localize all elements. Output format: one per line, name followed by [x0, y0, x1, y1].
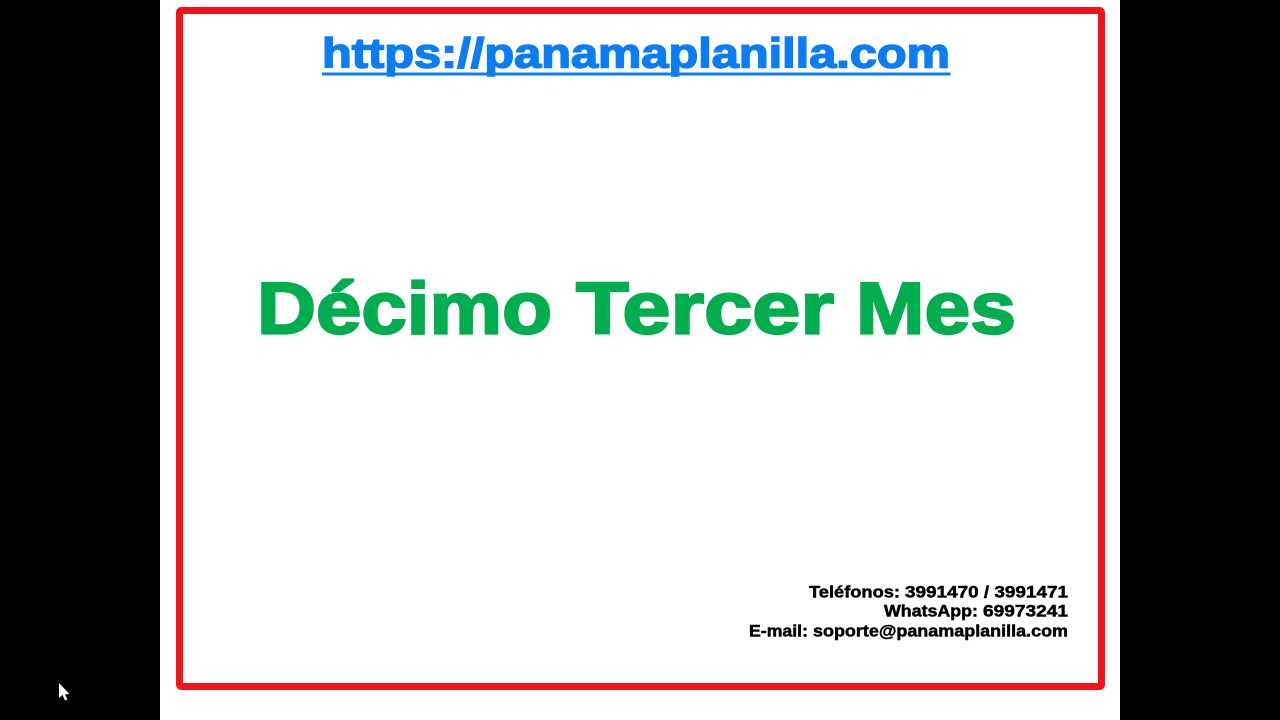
title: Tercer — [576, 268, 834, 350]
phone numbers — [809, 584, 1068, 602]
website link heading: https://panamaplanilla.com — [322, 30, 950, 76]
panel: red frame — [180, 10, 1102, 686]
WhatsApp number: WhatsApp: — [884, 602, 978, 620]
WhatsApp number — [884, 602, 1068, 620]
WhatsApp number: 69973241 — [983, 602, 1068, 620]
icon: mouse cursor — [59, 683, 70, 700]
phone numbers: Teléfonos: — [809, 584, 900, 602]
phone numbers: 3991470 / 3991471 — [905, 584, 1068, 602]
title: Décimo — [257, 268, 552, 350]
title: Mes — [856, 268, 1016, 350]
title — [257, 268, 1016, 350]
contact information — [749, 584, 1068, 640]
e-mail address: E-mail: — [749, 622, 808, 640]
e-mail address: soporte@panamaplanilla.com — [813, 622, 1068, 640]
panel: white slide — [160, 0, 1120, 720]
